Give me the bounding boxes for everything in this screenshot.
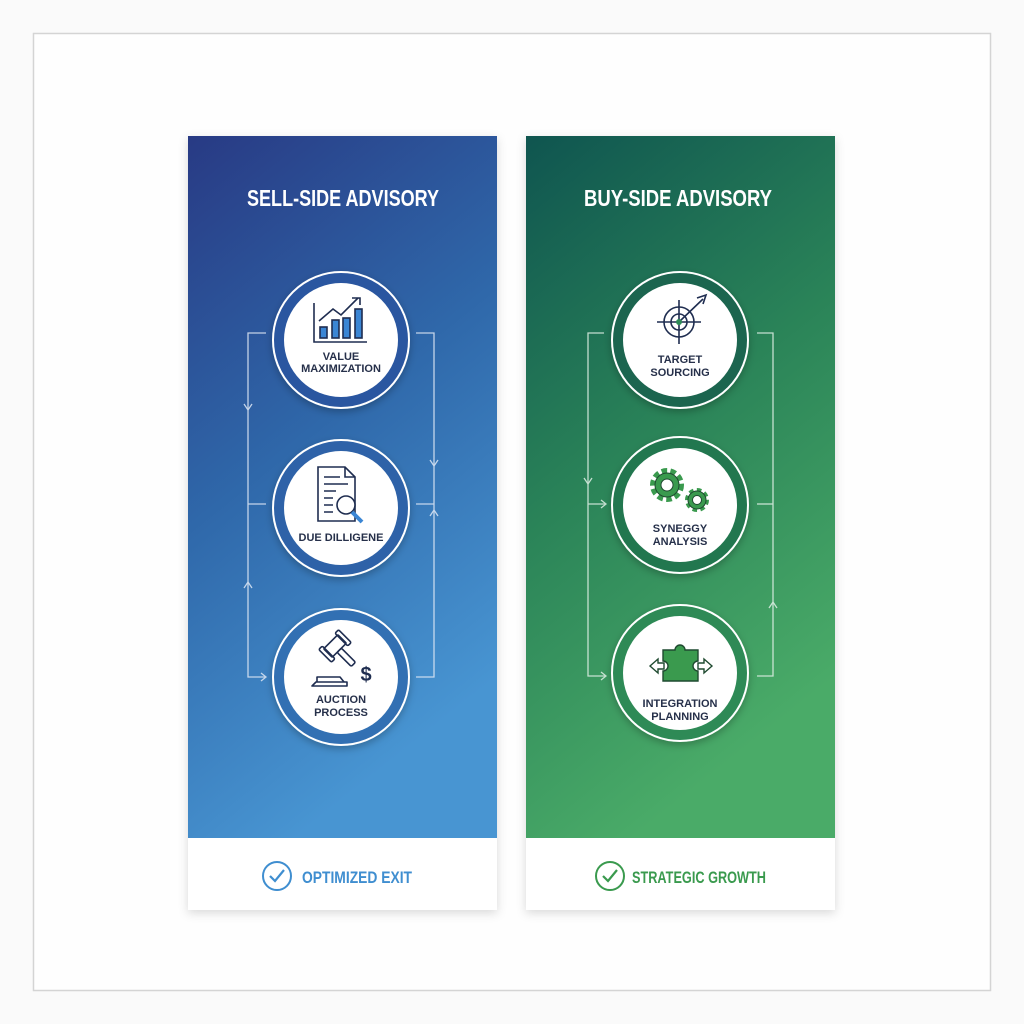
connector arrows: buy-side flow [584,333,777,680]
icon: bar chart [314,298,367,342]
icon: gears [654,472,706,509]
step: value maximization: MAXIMIZATION [301,363,381,375]
heading: buy-side advisory: BUY-SIDE ADVISORY [584,185,772,211]
step: synergy analysis: SYNEGGY [653,523,708,535]
icon: target [657,295,706,344]
icon: puzzle with arrows [650,645,712,681]
step: due diligence [273,440,409,576]
step: value maximization [273,272,409,408]
step: auction process: $ [360,664,372,686]
footer: strategic growth: STRATEGIC GROWTH [632,868,766,887]
step: integration planning [612,605,748,741]
step: auction process [273,609,409,745]
footer: optimized exit: OPTIMIZED EXIT [302,868,413,887]
icon: gavel and dollar [312,630,363,686]
heading: sell-side advisory: SELL-SIDE ADVISORY [247,185,439,211]
panel: buy-side advisory [526,136,835,910]
step: auction process: AUCTION [316,694,366,706]
step: integration planning: PLANNING [651,711,709,723]
step: value maximization: VALUE [323,351,359,363]
step: synergy analysis [612,437,748,573]
icon: document with magnifier [318,467,362,522]
footer: optimized exit [263,862,413,890]
step: due diligence: DUE DILLIGENE [299,532,383,544]
step: target sourcing: TARGET [658,354,702,366]
step: auction process: PROCESS [314,707,368,719]
footer: strategic growth [596,862,766,890]
step: target sourcing: SOURCING [650,367,710,379]
step: integration planning: INTEGRATION [643,698,718,710]
panel: sell-side advisory [188,136,497,910]
step: target sourcing [612,272,748,408]
connector arrows: sell-side flow [244,333,438,681]
step: synergy analysis: ANALYSIS [653,536,707,548]
